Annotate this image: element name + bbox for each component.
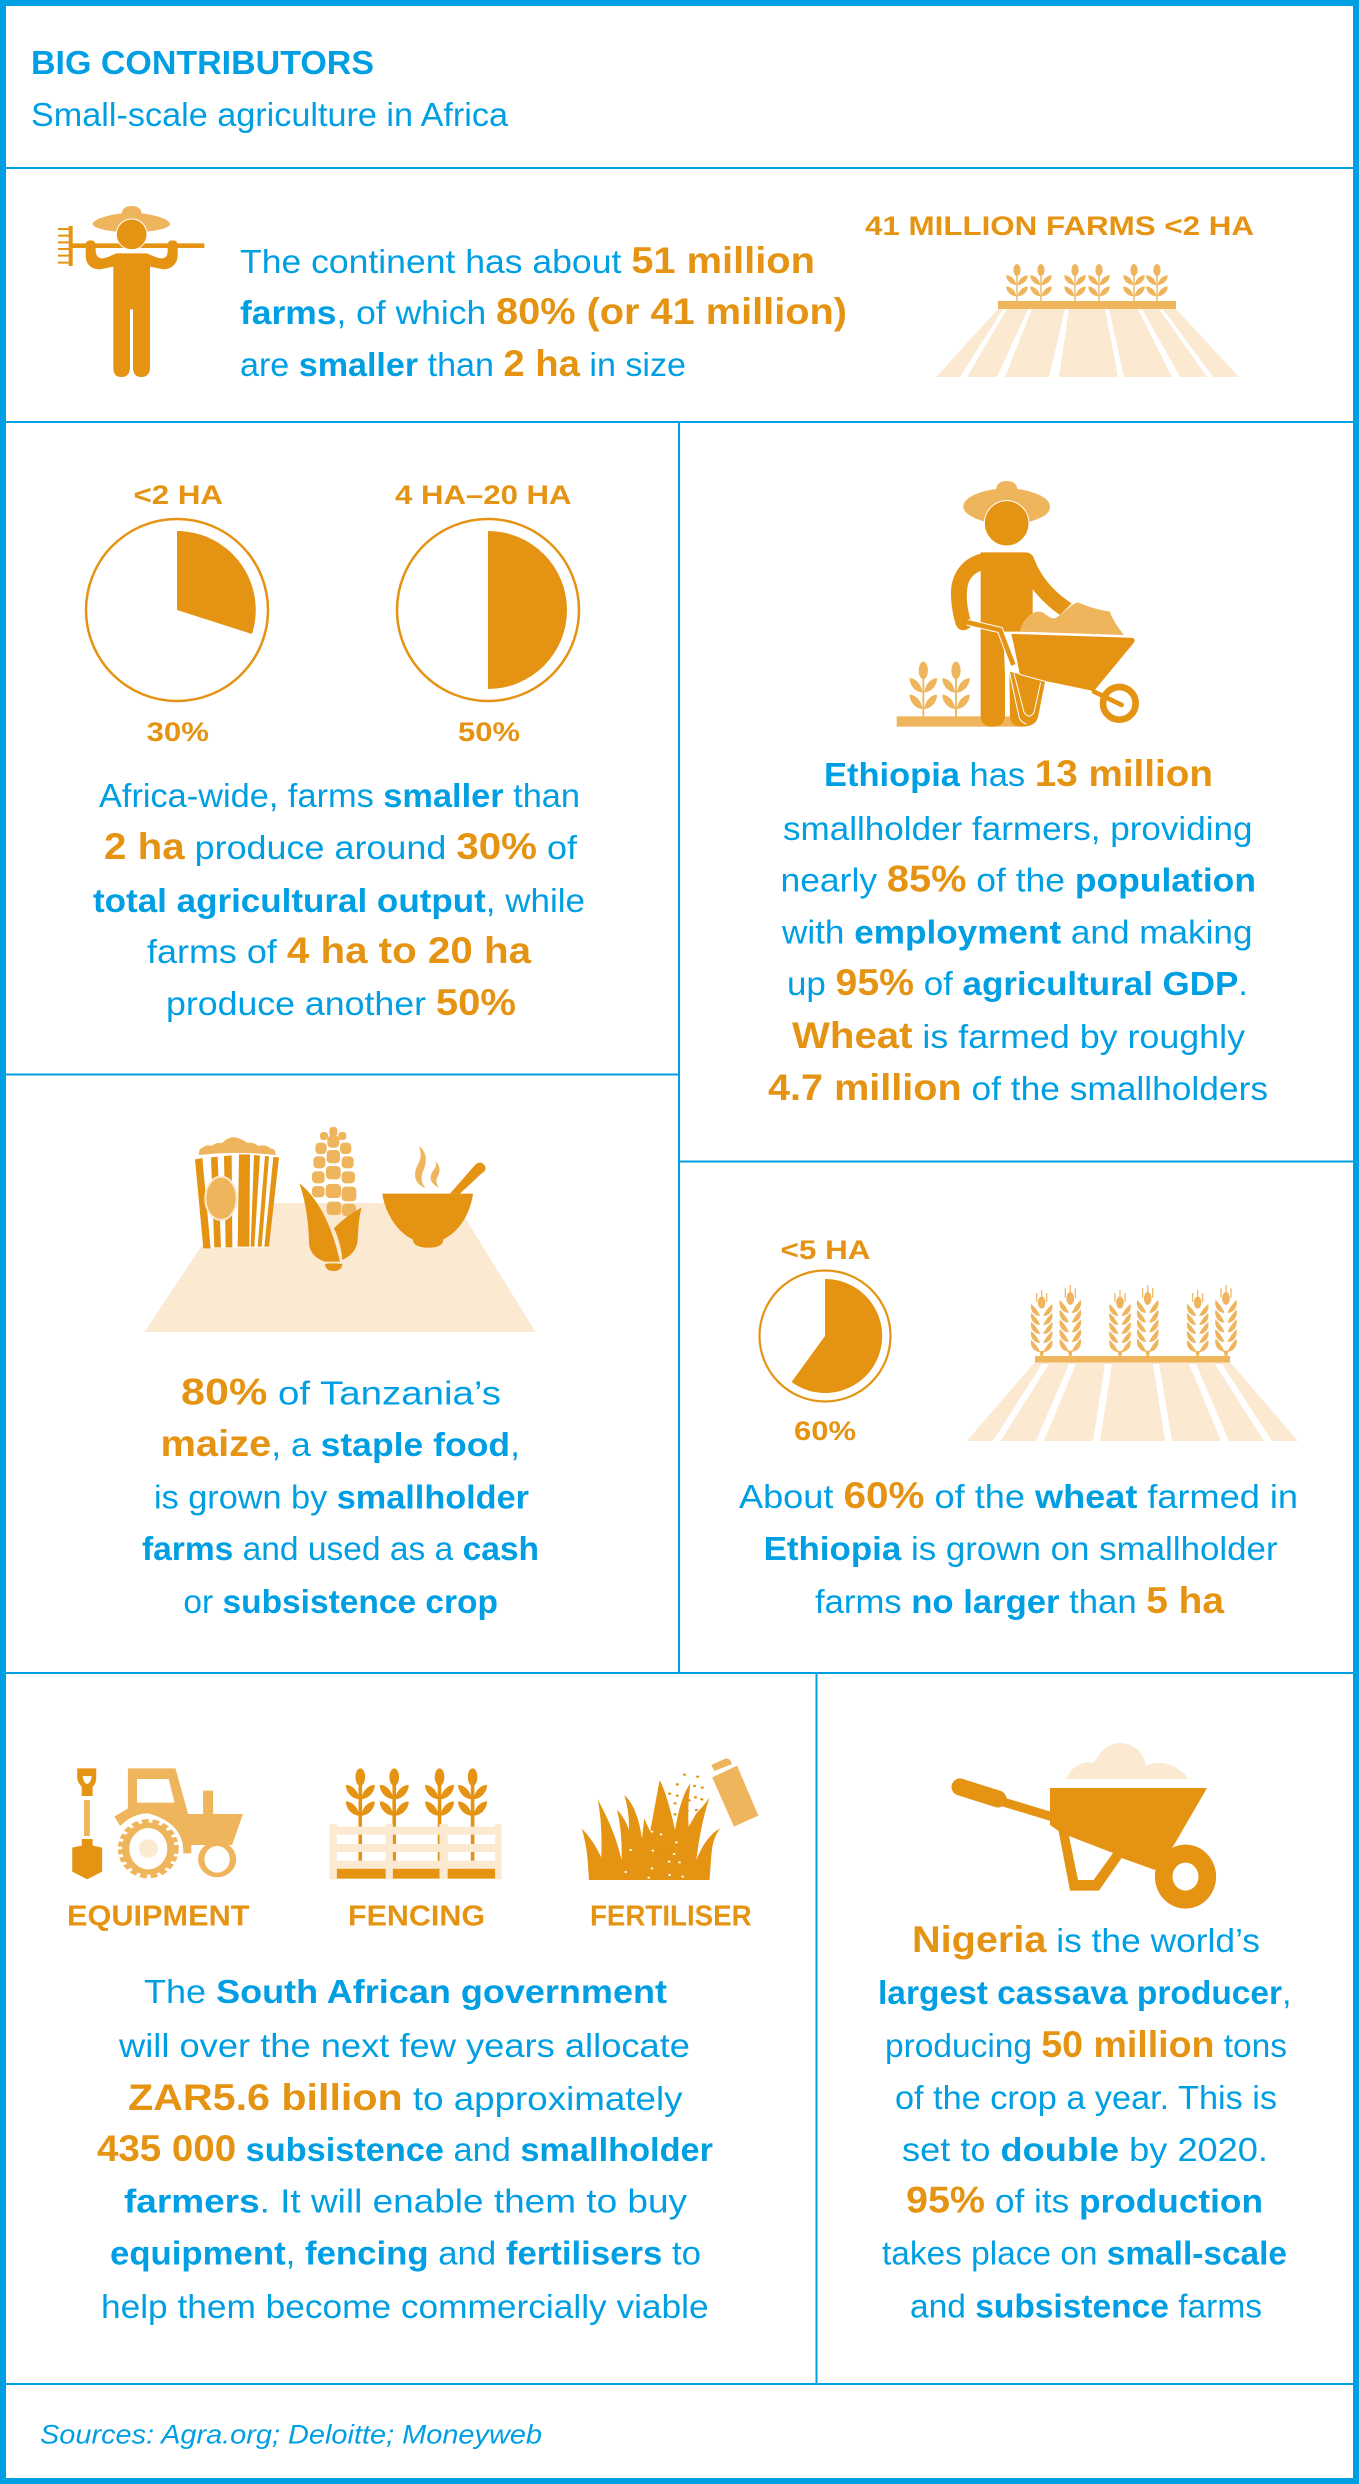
paragraph: Tanzania: is grown by smallholder <box>154 1479 529 1516</box>
paragraph: Africa-wide: Africa-wide, farms smaller than <box>99 777 580 814</box>
paragraph: Ethiopia <box>768 753 1268 1108</box>
paragraph: Tanzania <box>142 1372 539 1620</box>
paragraph: Africa-wide: total agricultural output , while <box>93 882 585 919</box>
paragraph: Africa-wide <box>93 777 585 1023</box>
pie label: under 2 ha: <2 HA <box>134 480 223 510</box>
paragraph: Africa-wide: 2 ha produce around 30% of <box>104 826 578 867</box>
icon: cassava wheelbarrow <box>960 1743 1216 1909</box>
paragraph: South African government: 435 000 subsistence and smallholder <box>97 2128 713 2169</box>
paragraph: Tanzania: farms and used as a cash <box>142 1530 539 1567</box>
paragraph: Ethiopia: 4.7 million of the smallholders <box>768 1067 1268 1108</box>
paragraph: Ethiopia: nearly 85% of the population <box>780 858 1256 900</box>
paragraph: continent farms: are smaller than 2 ha in size <box>240 343 686 384</box>
paragraph: Africa-wide: farms of 4 ha to 20 ha <box>147 930 531 971</box>
panel: Ethiopia wheat <box>681 1163 1353 1672</box>
paragraph: Ethiopia: up 95% of agricultural GDP . <box>787 962 1248 1003</box>
paragraph: wheat in Ethiopia: About 60% of the wheat farmed in <box>739 1475 1298 1516</box>
pie chart: 60% <box>760 1270 890 1402</box>
paragraph: Ethiopia: with employment and making <box>781 914 1252 950</box>
pie value: 30%: 30% <box>147 717 209 747</box>
icon: wheat field <box>967 1285 1298 1441</box>
pie chart: 30% <box>86 519 268 701</box>
paragraph: Nigeria: largest cassava producer, <box>878 1974 1291 2011</box>
paragraph: Africa-wide: produce another 50% <box>166 982 516 1023</box>
icon: grass and fertiliser bottle <box>582 1758 758 1880</box>
panel: Tanzania maize <box>6 1076 678 1672</box>
paragraph: Nigeria: of the crop a year. This is <box>895 2079 1277 2116</box>
paragraph: continent farms <box>240 240 847 384</box>
paragraph: wheat in Ethiopia <box>739 1475 1298 1621</box>
icon: small field with plants <box>936 264 1239 377</box>
paragraph: Ethiopia: Ethiopia has 13 million <box>824 753 1213 794</box>
paragraph: continent farms: farms, of which 80% (or 41 million) <box>240 291 847 332</box>
paragraph: continent farms: The continent has about 51 million <box>240 240 815 281</box>
paragraph: South African government: farmers . It will enable them to buy <box>124 2183 688 2220</box>
title: BIG CONTRIBUTORS <box>31 44 374 81</box>
paragraph: South African government: ZAR5.6 billion to approximately <box>128 2077 683 2118</box>
paragraph: Nigeria: takes place on small-scale <box>882 2234 1287 2272</box>
pie value: 50%: 50% <box>458 717 520 747</box>
panel: 51 million farms <box>6 169 1353 421</box>
panel: Africa-wide output pies <box>6 423 678 1073</box>
panel: Ethiopia smallholders <box>681 423 1353 1160</box>
paragraph: Nigeria: producing 50 million tons <box>885 2024 1287 2065</box>
icon: table with popcorn, corn and bowl <box>144 1127 536 1332</box>
paragraph: Nigeria: set to double by 2020. <box>902 2131 1268 2168</box>
icon: farmer with rake <box>58 206 204 377</box>
label: 41 million farms: 41 MILLION FARMS <2 HA <box>865 211 1254 241</box>
paragraph: South African government: The South African government <box>144 1973 667 2010</box>
paragraph: South African government: help them become commercially viable <box>101 2288 709 2325</box>
icon: fence with plants <box>329 1768 502 1879</box>
icon: popcorn box <box>195 1137 279 1248</box>
label: fertiliser: FERTILISER <box>590 1900 752 1932</box>
pie value: 60%: 60% <box>794 1416 856 1446</box>
icon: corn cob <box>299 1127 362 1271</box>
icon: steaming bowl <box>382 1146 486 1248</box>
paragraph: wheat in Ethiopia: farms no larger than 5 ha <box>815 1580 1224 1621</box>
pie label: 4 to 20 ha: 4 HA–20 HA <box>395 480 572 510</box>
paragraph: Nigeria: and subsistence farms <box>910 2288 1262 2324</box>
paragraph: Nigeria: Nigeria is the world’s <box>912 1919 1260 1960</box>
label: fencing: FENCING <box>348 1900 485 1932</box>
panel: header <box>6 6 1353 168</box>
sources: Sources: Agra.org; Deloitte; Moneyweb <box>40 2420 542 2450</box>
paragraph: Nigeria: 95% of its production <box>906 2180 1263 2221</box>
icon: shovel and tractor <box>72 1768 243 1879</box>
panel: South Africa <box>6 1675 815 2383</box>
paragraph: Ethiopia: smallholder farmers, providing <box>783 810 1252 847</box>
subtitle: Small-scale agriculture in Africa <box>31 96 509 133</box>
paragraph: South African government: equipment , fencing and fertilisers to <box>110 2234 701 2272</box>
pie chart: 50% <box>397 519 579 701</box>
paragraph: Ethiopia: Wheat is farmed by roughly <box>792 1015 1246 1056</box>
paragraph: Nigeria <box>878 1919 1291 2324</box>
icon: farmer with wheelbarrow <box>897 481 1136 727</box>
paragraph: Tanzania: 80% of Tanzania’s <box>181 1372 501 1412</box>
paragraph: South African government: will over the next few years allocate <box>118 2027 690 2064</box>
paragraph: wheat in Ethiopia: Ethiopia is grown on smallholder <box>764 1530 1278 1567</box>
paragraph: South African government <box>97 1973 713 2325</box>
paragraph: Tanzania: or subsistence crop <box>183 1583 498 1620</box>
panel: Nigeria <box>818 1675 1353 2383</box>
pie label: under 5 ha: <5 HA <box>780 1235 870 1265</box>
label: equipment: EQUIPMENT <box>67 1900 250 1932</box>
paragraph: Tanzania: maize, a staple food , <box>160 1423 520 1464</box>
